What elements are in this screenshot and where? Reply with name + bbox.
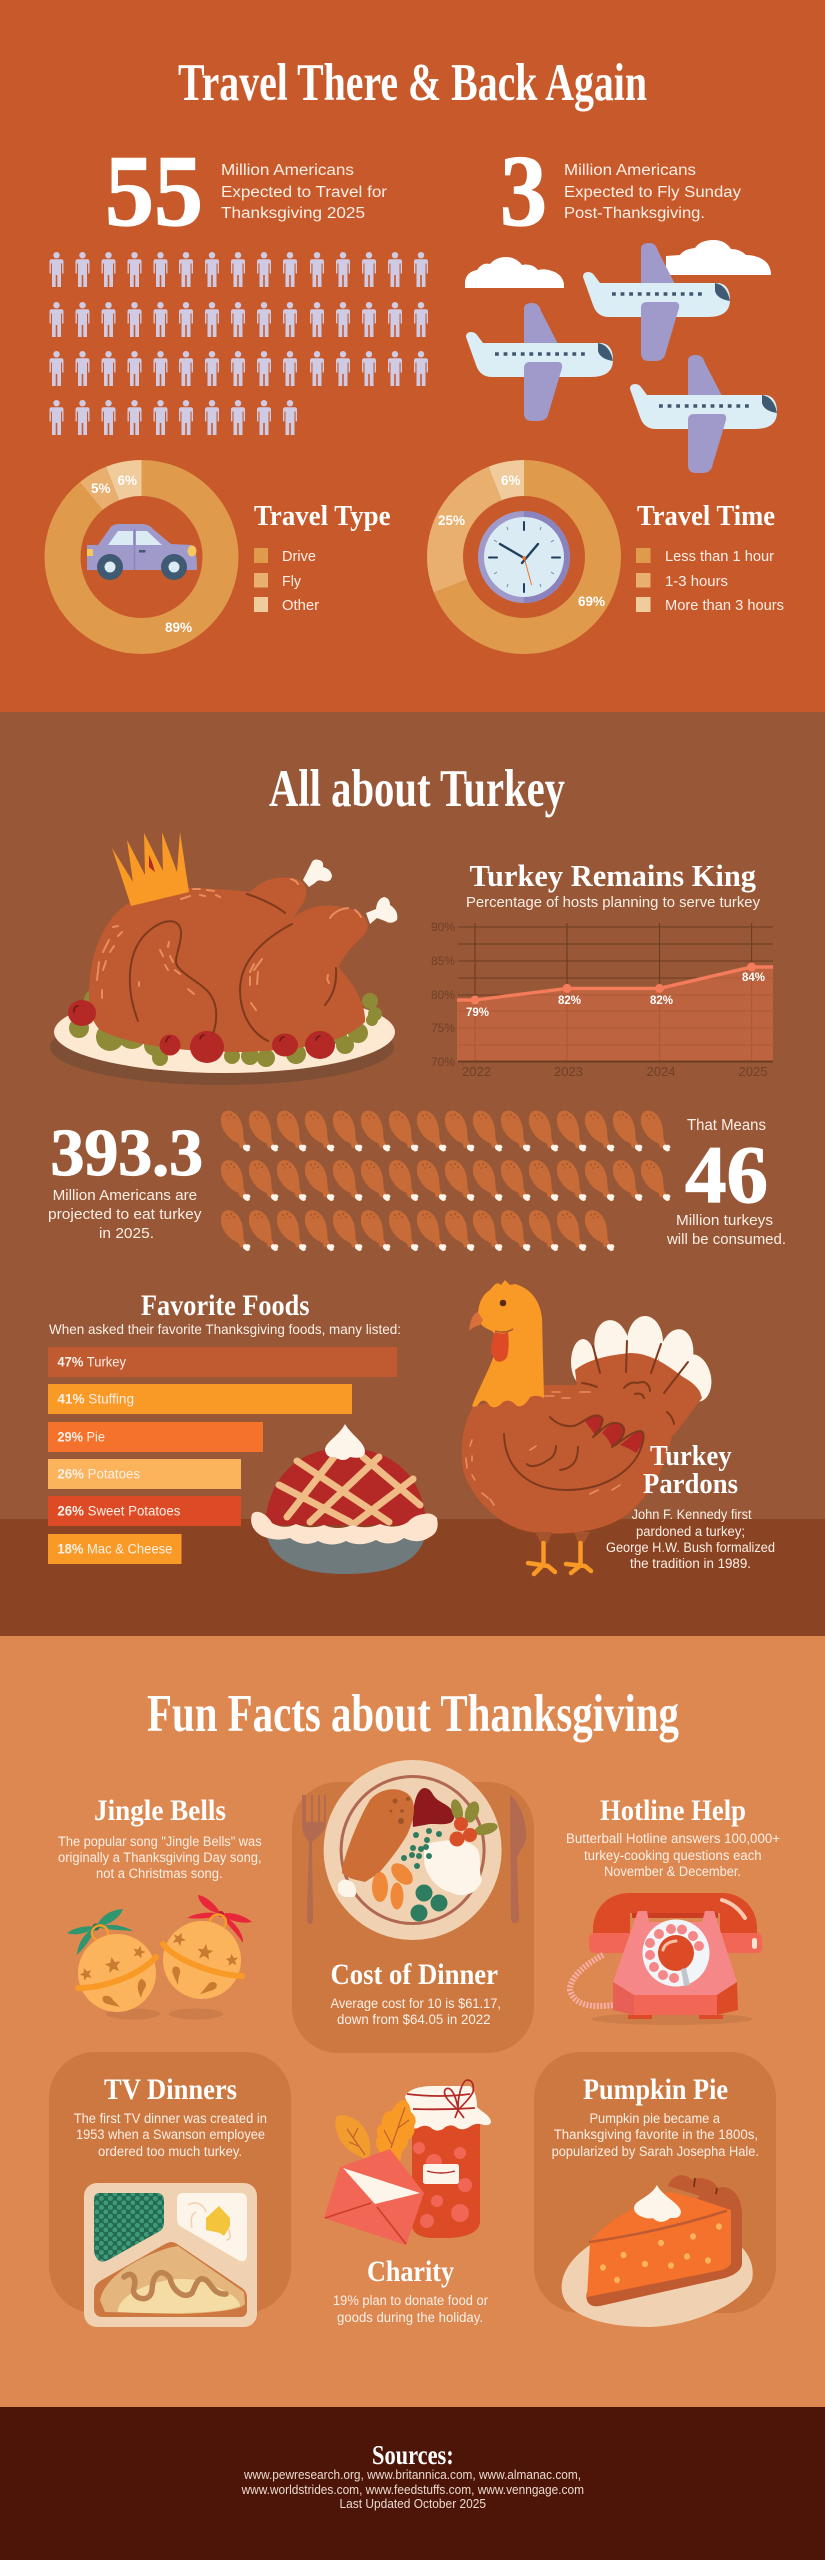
- illustration: roast turkey with crown: [50, 832, 397, 1085]
- callout: turkey pardons: Pardons: [643, 1468, 738, 1500]
- card: jingle bells: originally a Thanksgiving Day song,: [58, 1850, 262, 1865]
- text block: source list: www.pewresearch.org, www.britannica.com, www.almanac.com,: [243, 2468, 581, 2482]
- callout: turkey pardons: Turkey: [650, 1440, 732, 1472]
- bar chart: favorite foods: 41% Stuffing: [57, 1392, 134, 1406]
- icon: pumpkin pie slice: [562, 2175, 753, 2327]
- callout: turkey pardons: the tradition in 1989.: [630, 1556, 751, 1571]
- bar chart: favorite foods: 47% Turkey: [57, 1354, 126, 1370]
- legend: travel type: [254, 500, 391, 614]
- legend: travel type: Fly: [282, 574, 302, 590]
- text block: source list: Last Updated October 2025: [340, 2497, 486, 2511]
- legend: travel time: [636, 500, 784, 614]
- line chart: percentage of hosts serving turkey: 79%: [466, 1007, 489, 1019]
- line chart: percentage of hosts serving turkey: 85%: [431, 954, 455, 968]
- card: tv dinners: ordered too much turkey.: [98, 2144, 242, 2159]
- stat: 393.3 million: Million Americans are: [53, 1187, 197, 1204]
- line chart: percentage of hosts serving turkey: 2024: [646, 1064, 675, 1079]
- line chart: percentage of hosts serving turkey: 75%: [431, 1021, 455, 1035]
- donut chart: travel time: 6%: [501, 473, 521, 488]
- stat: 3 million flyers: Post-Thanksgiving.: [564, 205, 705, 222]
- card: pumpkin pie: [534, 2052, 776, 2327]
- card: hotline help: turkey-cooking questions each: [584, 1848, 762, 1863]
- illustration: standing turkey: [462, 1280, 716, 1574]
- stat: 3 million flyers: 3: [500, 135, 547, 248]
- card: charity: Charity: [367, 2255, 454, 2288]
- callout: turkey pardons: George H.W. Bush formalized: [606, 1540, 775, 1555]
- line chart: percentage of hosts serving turkey: 80%: [431, 988, 455, 1002]
- stat: 393.3 million: projected to eat turkey: [48, 1206, 202, 1223]
- stat: 46 million turkeys: That Means: [687, 1117, 766, 1134]
- bar chart: favorite foods: 29% Pie: [57, 1430, 105, 1444]
- bar chart: favorite foods: [48, 1289, 401, 1564]
- bar chart: favorite foods: 26% Sweet Potatoes: [57, 1504, 181, 1518]
- card: jingle bells: The popular song "Jingle Bells" was: [58, 1834, 262, 1849]
- pictogram: people rows: [50, 252, 428, 435]
- icon: rotary telephone: [570, 1893, 762, 2025]
- icon: clouds: [465, 240, 771, 288]
- card: pumpkin pie: Thanksgiving favorite in the 1800s,: [554, 2127, 758, 2142]
- line chart: percentage of hosts serving turkey: 2023: [554, 1064, 583, 1079]
- legend: travel time: Travel Time: [637, 500, 775, 532]
- heading: sources: Sources:: [372, 2440, 454, 2470]
- line chart: percentage of hosts serving turkey: [431, 920, 773, 1079]
- panel: sources: [0, 2407, 825, 2560]
- chart heading: turkey remains king: [466, 858, 761, 911]
- card: tv dinners: The first TV dinner was created in: [74, 2111, 267, 2126]
- line chart: percentage of hosts serving turkey: 2025: [738, 1064, 767, 1079]
- line chart: percentage of hosts serving turkey: 70%: [431, 1055, 455, 1069]
- donut chart: travel time: [438, 473, 605, 636]
- legend: travel time: 1-3 hours: [665, 574, 728, 590]
- bar chart: favorite foods: Favorite Foods: [141, 1289, 310, 1322]
- line chart: percentage of hosts serving turkey: 82%: [558, 995, 581, 1007]
- donut chart: travel type: 89%: [165, 620, 192, 635]
- legend: travel time: More than 3 hours: [665, 598, 784, 614]
- line chart: percentage of hosts serving turkey: 90%: [431, 920, 455, 934]
- icon: clock: [478, 511, 570, 603]
- stat: 3 million flyers: Expected to Fly Sunday: [564, 184, 741, 201]
- card: cost of dinner: Cost of Dinner: [330, 1958, 498, 1991]
- line chart: percentage of hosts serving turkey: 82%: [650, 995, 673, 1007]
- heading: fun facts about thanksgiving: Fun Facts about Thanksgiving: [147, 1685, 679, 1743]
- heading: travel there and back again: Travel There & Back Again: [178, 54, 647, 112]
- line chart: percentage of hosts serving turkey: 84%: [742, 972, 765, 984]
- icon: jingle bells: [67, 1895, 252, 2020]
- stat: 393.3 million: [48, 1116, 203, 1242]
- panel: fun facts about thanksgiving: [0, 1636, 825, 2407]
- legend: travel type: Travel Type: [254, 500, 391, 532]
- card: hotline help: Hotline Help: [600, 1794, 746, 1827]
- chart heading: turkey remains king: Turkey Remains King: [470, 858, 756, 893]
- stat: 46 million turkeys: 46: [685, 1129, 768, 1220]
- stat: 393.3 million: 393.3: [50, 1116, 203, 1190]
- stat: 46 million turkeys: [666, 1117, 786, 1248]
- donut chart: travel type: 6%: [118, 473, 137, 488]
- donut chart: travel time: 69%: [578, 594, 605, 609]
- card: pumpkin pie: Pumpkin pie became a: [590, 2111, 720, 2126]
- stat: 55 million travellers: Thanksgiving 2025: [221, 205, 365, 222]
- donut chart: travel type: 5%: [91, 481, 111, 496]
- card: cost of dinner: Average cost for 10 is $61.17,: [330, 1996, 501, 2011]
- legend: travel time: Less than 1 hour: [665, 549, 774, 565]
- illustration: lattice pie: [251, 1424, 438, 1574]
- card: jingle bells: not a Christmas song.: [96, 1866, 223, 1881]
- card: charity: [324, 2080, 491, 2325]
- card: tv dinners: [49, 2052, 291, 2327]
- card: charity: 19% plan to donate food or: [333, 2293, 488, 2308]
- legend: travel type: Other: [282, 598, 319, 614]
- card: jingle bells: Jingle Bells: [94, 1794, 226, 1827]
- bar chart: favorite foods: 18% Mac & Cheese: [57, 1542, 172, 1556]
- card: tv dinners: 1953 when a Swanson employee: [76, 2127, 265, 2142]
- heading: all about turkey: All about Turkey: [269, 760, 565, 818]
- stat: 55 million travellers: Million Americans: [221, 162, 354, 179]
- legend: travel type: Drive: [282, 549, 316, 565]
- card: cost of dinner: [292, 1760, 534, 2053]
- line chart: percentage of hosts serving turkey: 2022: [462, 1064, 491, 1079]
- stat: 3 million flyers: Million Americans: [564, 162, 696, 179]
- panel: travel there and back again: [0, 0, 825, 712]
- card: jingle bells: [58, 1794, 262, 2020]
- icon: fork: [302, 1795, 326, 1924]
- card: hotline help: Butterball Hotline answers 100,000+: [566, 1831, 780, 1846]
- card: tv dinners: TV Dinners: [104, 2073, 237, 2106]
- stat: 46 million turkeys: will be consumed.: [666, 1231, 786, 1248]
- text block: source list: www.worldstrides.com, www.feedstuffs.com, www.venngage.com: [241, 2483, 584, 2497]
- stat: 55 million travellers: Expected to Travel for: [221, 184, 387, 201]
- card: charity: goods during the holiday.: [337, 2310, 483, 2325]
- stat: 55 million travellers: 55: [105, 135, 203, 248]
- stat: 55 million travellers: [105, 135, 387, 248]
- stat: 393.3 million: in 2025.: [99, 1225, 154, 1242]
- illustration: thanksgiving plate: [324, 1760, 502, 1940]
- card: cost of dinner: down from $64.05 in 2022: [337, 2012, 490, 2027]
- donut chart: travel time: 25%: [438, 513, 465, 528]
- bar chart: favorite foods: 26% Potatoes: [57, 1466, 140, 1482]
- icon: jar, leaves and envelope: [324, 2080, 491, 2245]
- callout: turkey pardons: John F. Kennedy first: [632, 1507, 752, 1522]
- panel: all about turkey: [0, 712, 825, 1636]
- pictogram: drumsticks rows: [221, 1111, 670, 1251]
- donut chart: travel type: [62, 473, 220, 636]
- stat: 46 million turkeys: Million turkeys: [676, 1212, 773, 1229]
- card: pumpkin pie: popularized by Sarah Josepha Hale.: [552, 2144, 759, 2159]
- card: pumpkin pie: Pumpkin Pie: [583, 2073, 728, 2106]
- icon: tv dinner tray: [84, 2183, 257, 2327]
- icon: knife: [510, 1795, 526, 1923]
- card: hotline help: [566, 1794, 780, 2025]
- icon: airplanes: [466, 243, 777, 473]
- bar chart: favorite foods: When asked their favorite Thanksgiving foods, many listed:: [49, 1321, 401, 1337]
- stat: 3 million flyers: [500, 135, 741, 248]
- text block: source list: [241, 2468, 584, 2511]
- callout: turkey pardons: [606, 1440, 775, 1571]
- callout: turkey pardons: pardoned a turkey;: [636, 1524, 745, 1539]
- icon: car: [87, 524, 197, 580]
- chart heading: turkey remains king: Percentage of hosts planning to serve turkey: [466, 895, 761, 911]
- card: hotline help: November & December.: [604, 1864, 741, 1879]
